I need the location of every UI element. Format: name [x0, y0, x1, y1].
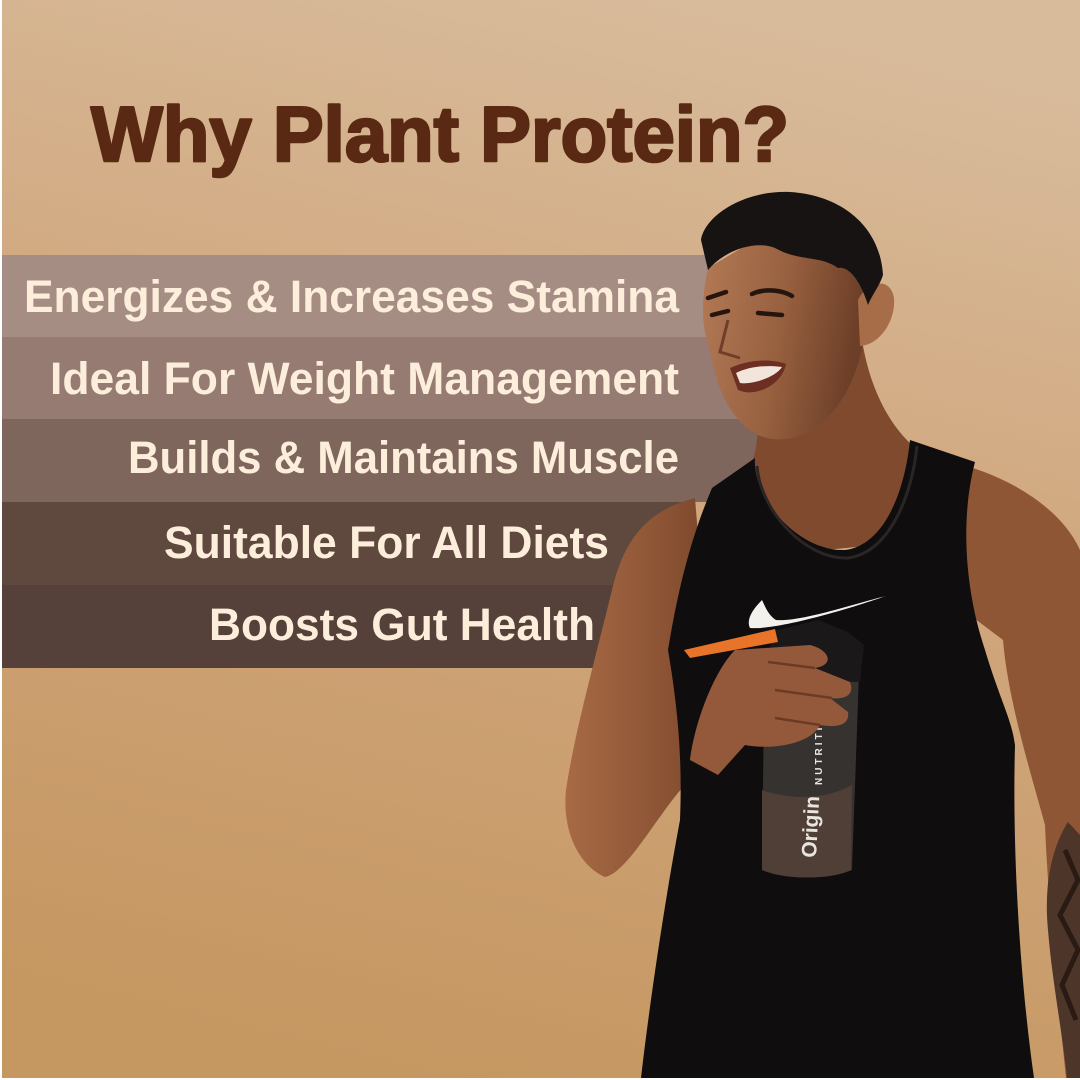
band: weight management [2, 337, 742, 419]
band: stamina [2, 255, 708, 337]
hand [690, 645, 851, 775]
band: stamina: Energizes & Increases Stamina [24, 271, 680, 322]
shaker bottle: NUTRITION [814, 704, 825, 785]
right arm [950, 462, 1080, 1078]
tank neckline trim [757, 446, 917, 558]
band: muscle: Builds & Maintains Muscle [128, 432, 679, 483]
smile [730, 361, 786, 392]
person with shaker [565, 192, 1080, 1078]
shaker bottle: Origin [798, 795, 824, 858]
tank top [641, 440, 1034, 1078]
tattoo [1047, 822, 1080, 1078]
shaker bottle [684, 620, 864, 878]
head [703, 225, 866, 439]
band: diets [2, 502, 682, 585]
ear [858, 283, 894, 346]
benefits list [2, 255, 762, 668]
neck and shoulders [720, 340, 930, 560]
eyebrows and eyes [708, 290, 792, 315]
left upper arm [565, 498, 740, 877]
band: gut health: Boosts Gut Health [209, 599, 595, 650]
nose [720, 320, 740, 358]
band: weight management: Ideal For Weight Management [50, 353, 679, 404]
logo swoosh [749, 596, 886, 628]
title: Why Plant Protein? [91, 90, 789, 178]
band: muscle [2, 419, 762, 502]
hair [701, 192, 883, 305]
band: gut health [2, 585, 662, 668]
band: diets: Suitable For All Diets [164, 517, 609, 568]
